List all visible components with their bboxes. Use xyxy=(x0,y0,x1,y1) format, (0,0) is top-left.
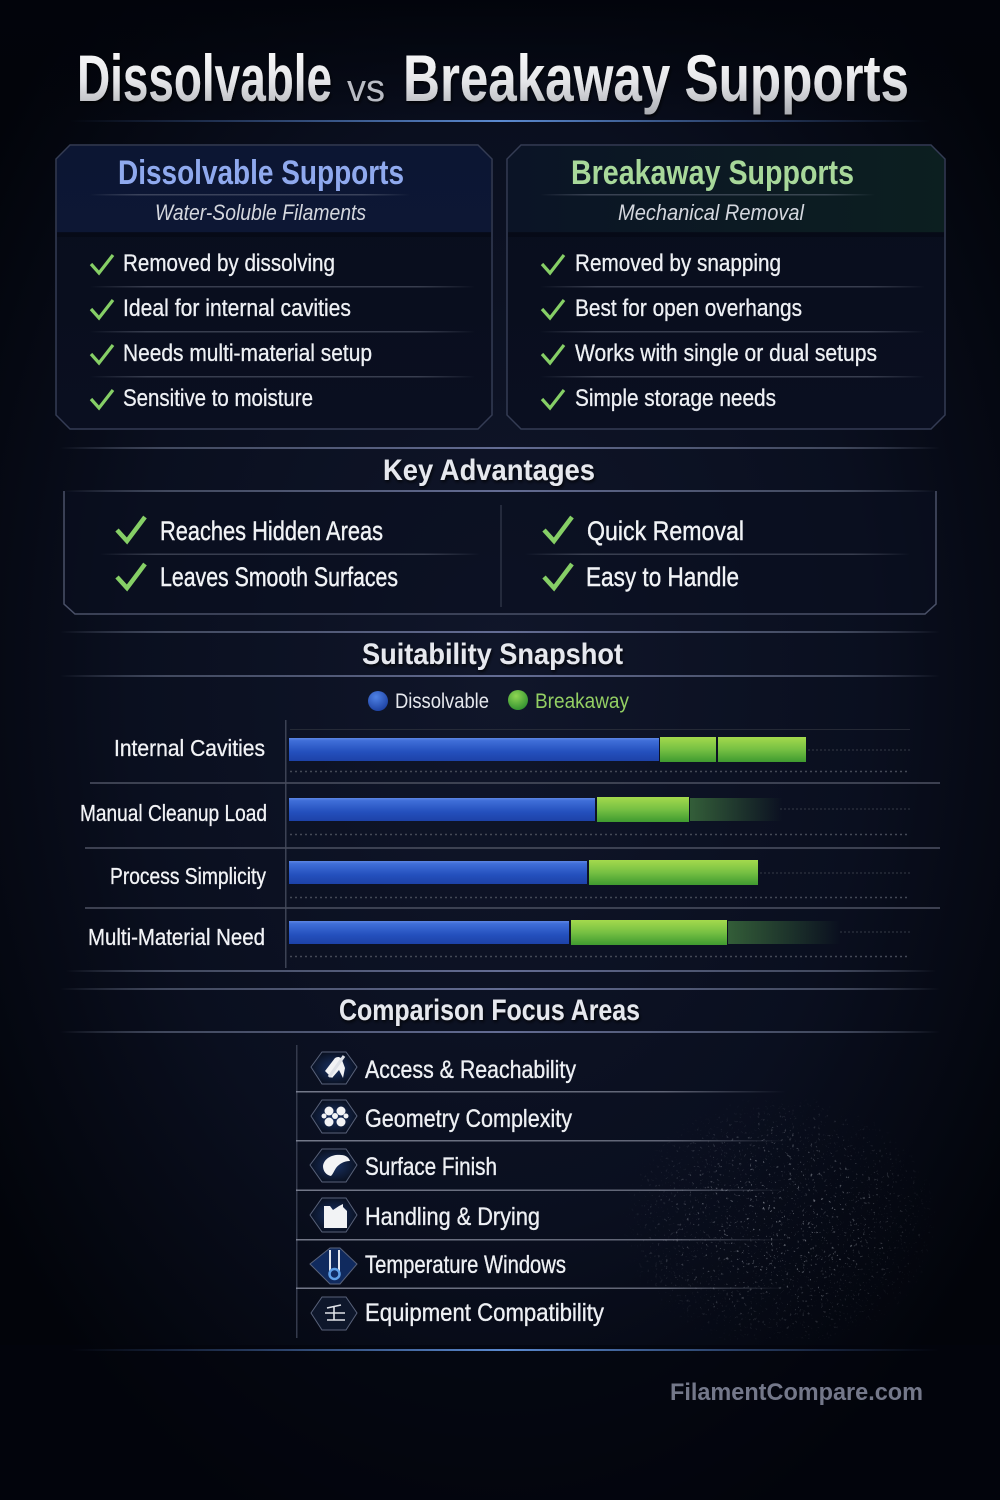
item: surface finish: Surface Finish xyxy=(365,1153,497,1181)
advantages: dissolvable: Reaches Hidden Areas xyxy=(160,516,383,546)
bar chart: suitability xyxy=(66,720,940,972)
list: breakaway properties xyxy=(542,250,877,412)
subheading: mechanical removal: Mechanical Removal xyxy=(618,200,805,225)
advantages: breakaway: Quick Removal xyxy=(587,516,744,546)
footer: source: FilamentCompare.com xyxy=(670,1379,923,1406)
row: internal cavities: Internal Cavities xyxy=(114,735,265,761)
legend: Breakaway xyxy=(535,690,629,713)
title: Dissolvable xyxy=(77,41,332,115)
item: geometry complexity xyxy=(311,1100,572,1133)
list: breakaway properties: Best for open overhangs xyxy=(575,295,802,322)
legend: Dissolvable xyxy=(395,690,489,713)
heading: dissolvable supports: Dissolvable Supports xyxy=(118,154,404,192)
item: handling and drying xyxy=(310,1198,540,1232)
legend xyxy=(368,690,629,713)
heading: comparison focus areas: Comparison Focus Areas xyxy=(339,994,640,1027)
row: process simplicity: Process Simplicity xyxy=(110,863,266,889)
heading: suitability snapshot: Suitability Snapshot xyxy=(362,638,623,671)
advantages: dissolvable: Leaves Smooth Surfaces xyxy=(160,562,398,592)
row: internal cavities xyxy=(114,735,806,762)
row: manual cleanup load xyxy=(80,797,782,826)
item: handling and drying: Handling & Drying xyxy=(365,1203,540,1231)
list: comparison focus areas xyxy=(296,1045,786,1338)
subheading: water-soluble filaments: Water-Soluble Filaments xyxy=(155,200,366,225)
item: surface finish xyxy=(310,1149,497,1182)
panel: key advantages xyxy=(64,490,936,614)
advantages: breakaway: Easy to Handle xyxy=(586,562,739,592)
list: dissolvable properties: Ideal for internal cavities xyxy=(123,295,351,322)
item: geometry complexity: Geometry Complexity xyxy=(365,1105,572,1133)
list: dissolvable properties: Needs multi-material setup xyxy=(123,340,372,367)
advantages: breakaway xyxy=(544,516,744,592)
list: breakaway properties: Removed by snapping xyxy=(575,250,781,277)
item: access and reachability: Access & Reachability xyxy=(365,1056,576,1084)
title: vs xyxy=(347,68,385,110)
panel: dissolvable supports xyxy=(56,145,492,429)
heading: key advantages: Key Advantages xyxy=(383,454,595,487)
row: multi-material need xyxy=(88,920,840,950)
list: dissolvable properties: Removed by dissolving xyxy=(123,250,335,277)
panel: breakaway supports xyxy=(507,145,945,429)
item: equipment compatibility: Equipment Compatibility xyxy=(365,1299,604,1327)
row: process simplicity xyxy=(110,860,758,889)
list: dissolvable properties xyxy=(91,250,372,412)
item: temperature windows: Temperature Windows xyxy=(365,1251,566,1279)
advantages: dissolvable xyxy=(117,516,398,592)
list: breakaway properties: Works with single or dual setups xyxy=(575,340,877,367)
item: equipment compatibility xyxy=(311,1297,604,1330)
item: access and reachability xyxy=(311,1052,576,1084)
title xyxy=(77,41,909,115)
row: manual cleanup load: Manual Cleanup Load xyxy=(80,800,267,826)
list: breakaway properties: Simple storage needs xyxy=(575,385,776,412)
item: temperature windows xyxy=(310,1248,566,1284)
list: dissolvable properties: Sensitive to moisture xyxy=(123,385,313,412)
heading: breakaway supports: Breakaway Supports xyxy=(571,154,854,192)
row: multi-material need: Multi-Material Need xyxy=(88,924,265,950)
